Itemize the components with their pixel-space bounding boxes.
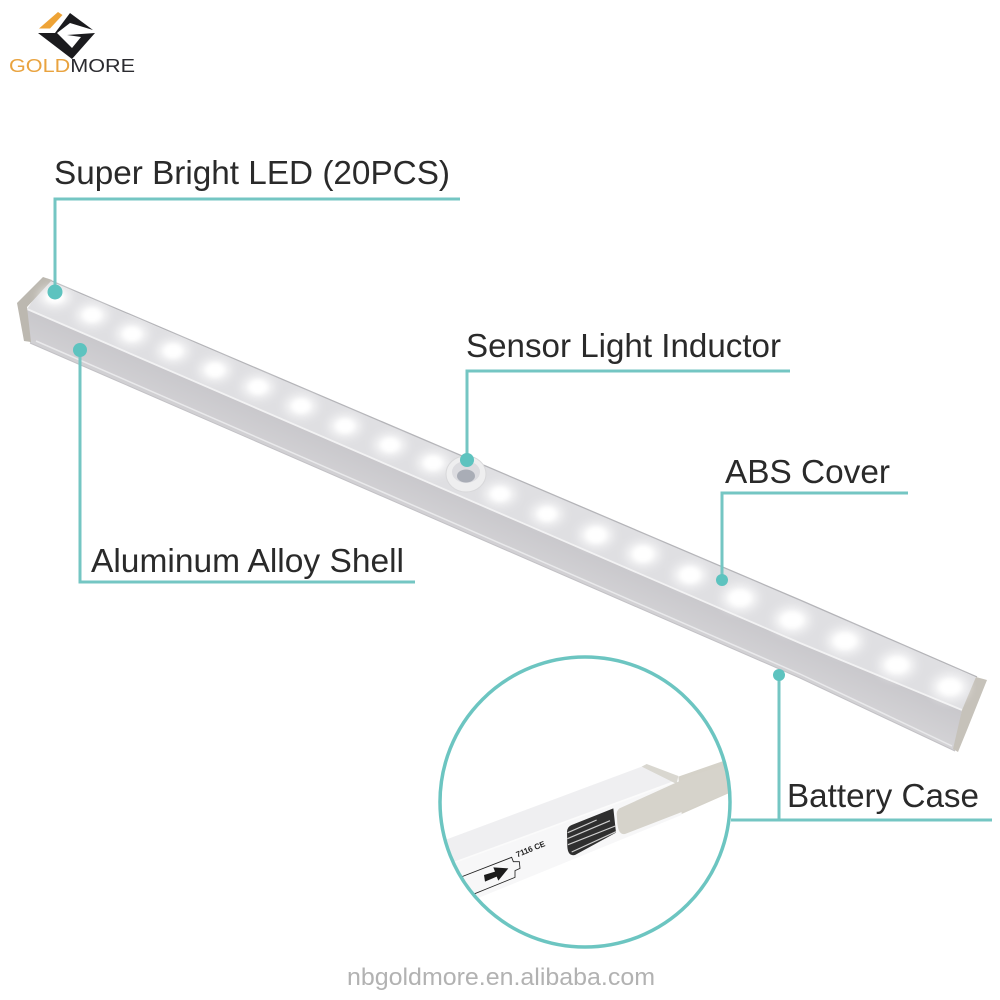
sensor dome [446,456,486,492]
battery slot streaks [567,820,616,852]
battery outline [462,856,520,894]
logo wordmark: GOLD MORE [9,55,135,76]
lower lip of front face [30,343,955,751]
inset: battery case detail [440,657,730,947]
aluminum front face [27,309,962,751]
callout: Battery Case [731,669,992,820]
callout: ABS Cover [716,453,908,586]
callout: Sensor Light Inductor: Sensor Light Inductor [466,327,781,364]
end collar [642,764,678,784]
footer website: nbgoldmore.en.alibaba.com [347,964,655,991]
callout: Aluminum Alloy Shell: Aluminum Alloy Shell [91,542,404,579]
left end cap [17,277,52,342]
case front face [443,781,682,900]
battery slot [567,808,616,855]
diffuser top face [27,280,977,710]
model number: 7116 CE [515,839,547,859]
edge between cover and shell [27,309,962,710]
tab grip [616,782,682,834]
crease line [455,796,634,862]
callout: Super Bright LED [48,154,460,300]
callout: Aluminum Alloy Shell [73,343,415,582]
inset ring [440,657,730,947]
top edge highlight [47,279,977,677]
logo icon: diamond G [38,12,95,59]
groove on the front face [36,341,952,746]
logo: Goldmore [9,12,135,76]
pull tab [678,761,730,814]
arrow icon [484,867,508,882]
inset photo [443,761,730,900]
right end cap [953,677,987,752]
callout: Super Bright LED: Super Bright LED (20PCS) [54,154,450,191]
LEDs [39,287,968,700]
callout: ABS Cover: ABS Cover [725,453,890,490]
product: LED light bar [17,277,987,752]
callout: Battery Case: Battery Case [787,777,979,814]
case top face [443,767,675,863]
callout: Sensor Light Inductor [460,327,790,467]
